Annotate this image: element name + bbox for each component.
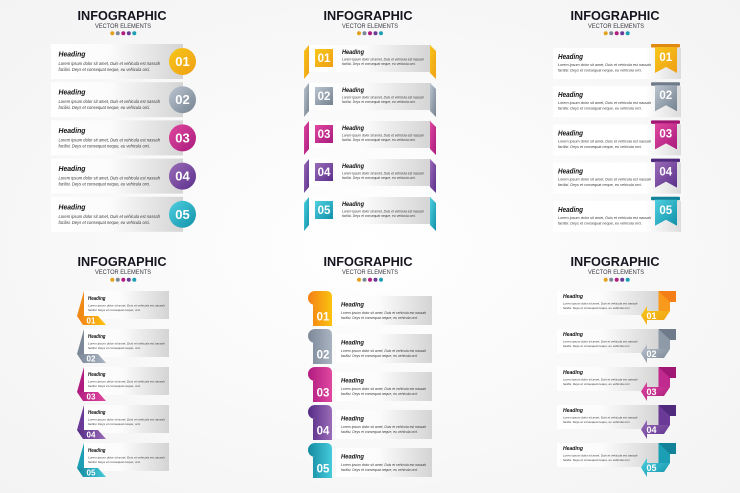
row 03: Lorem ipsum dolor sit amet, Duis et vehicula est nassah bbox=[88, 380, 165, 384]
row 04: Heading bbox=[563, 408, 584, 414]
row 01: facilisi. Deys et consequat neque, eu vehicula orci. bbox=[58, 67, 150, 72]
row 05 bbox=[308, 443, 432, 478]
title: INFOGRAPHIC bbox=[324, 8, 413, 23]
row 02: facilisi. Deys et consequat neque, eu vehicula orci. bbox=[558, 107, 642, 111]
row 04: Lorem ipsum dolor sit amet, Duis et vehicula est nassah bbox=[563, 416, 638, 420]
row 01: facilisi. Deys et consequat neque, eu vehicula orci. bbox=[558, 68, 642, 72]
row 03: Heading bbox=[341, 378, 364, 384]
subtitle: VECTOR ELEMENTS bbox=[588, 23, 645, 30]
row 05: Lorem ipsum dolor sit amet, Duis et vehicula est nassah bbox=[58, 214, 161, 219]
row 05: 05 bbox=[646, 463, 657, 473]
row 04: 04 bbox=[175, 169, 190, 184]
title: INFOGRAPHIC bbox=[324, 254, 413, 269]
row 01: Lorem ipsum dolor sit amet, Duis et vehicula est nassah bbox=[341, 311, 426, 315]
row 02: 02 bbox=[317, 350, 329, 362]
row 03: Lorem ipsum dolor sit amet, Duis et vehicula est nassah bbox=[58, 137, 161, 142]
panel: circle badges bbox=[51, 8, 196, 232]
row 05: Heading bbox=[342, 201, 364, 208]
row 01: 01 bbox=[659, 52, 673, 64]
row 05: Heading bbox=[58, 202, 86, 211]
row 03: facilisi. Deys et consequat neque, eu vehicula orci. bbox=[558, 145, 642, 149]
panel: square badges with side ribbons bbox=[304, 8, 436, 231]
row 03: Heading bbox=[58, 126, 86, 135]
subtitle: VECTOR ELEMENTS bbox=[588, 269, 645, 276]
row 05: 05 bbox=[87, 468, 96, 478]
row 02 bbox=[553, 82, 681, 117]
row 03: 03 bbox=[659, 128, 672, 140]
row 04: Heading bbox=[58, 164, 86, 173]
colour dots bbox=[604, 278, 630, 282]
row 01 bbox=[304, 45, 436, 79]
row 03: facilisi. Deys et consequat neque, eu vehicula orci. bbox=[341, 392, 418, 396]
row 05: 05 bbox=[175, 207, 190, 222]
row 01: Heading bbox=[88, 296, 106, 302]
title: INFOGRAPHIC bbox=[78, 254, 167, 269]
row 01: Lorem ipsum dolor sit amet, Duis et vehicula est nassah bbox=[58, 61, 161, 66]
row 05: facilisi. Deys et consequat neque, eu vehicula orci. bbox=[341, 468, 418, 472]
row 05: 05 bbox=[659, 205, 673, 217]
row 05: Lorem ipsum dolor sit amet, Duis et vehicula est nassah bbox=[341, 463, 426, 467]
colour dots bbox=[110, 31, 136, 35]
row 02 bbox=[557, 329, 676, 363]
row 04: facilisi. Deys et consequat neque, eu vehicula orci. bbox=[341, 430, 418, 434]
row 03 bbox=[51, 120, 196, 155]
row 03 bbox=[304, 121, 436, 155]
row 04 bbox=[304, 159, 436, 193]
row 02: Heading bbox=[563, 332, 584, 338]
row 05 bbox=[553, 197, 681, 232]
row 02: Heading bbox=[88, 334, 106, 340]
row 02: 02 bbox=[175, 92, 190, 107]
row 05: Heading bbox=[558, 207, 584, 214]
row 04 bbox=[77, 405, 169, 440]
row 04: 04 bbox=[317, 426, 330, 438]
row 04: facilisi. Deys et consequat neque, eu vehicula orci. bbox=[342, 176, 416, 180]
row 03: Heading bbox=[88, 372, 106, 378]
row 01: facilisi. Deys et consequat neque, orci. bbox=[88, 308, 141, 312]
row 01: Heading bbox=[58, 50, 86, 58]
row 01 bbox=[308, 291, 432, 326]
row 05: Heading bbox=[341, 454, 364, 460]
row 05: 05 bbox=[317, 464, 330, 476]
row 05: Lorem ipsum dolor sit amet, Duis et vehicula est nassah bbox=[342, 210, 424, 214]
row 03 bbox=[553, 120, 681, 155]
colour dots bbox=[110, 278, 136, 282]
row 01 bbox=[51, 44, 196, 79]
row 02: Lorem ipsum dolor sit amet, Duis et vehicula est nassah bbox=[558, 101, 651, 105]
row 02: facilisi. Deys et consequat neque, eu vehicula orci. bbox=[341, 354, 418, 358]
row 02: facilisi. Deys et consequat neque, eu vehicula orci. bbox=[563, 344, 630, 348]
row 04: facilisi. Deys et consequat neque, eu vehicula orci. bbox=[58, 182, 150, 187]
row 02: 02 bbox=[318, 91, 330, 103]
row 04: Lorem ipsum dolor sit amet, Duis et vehicula est nassah bbox=[58, 176, 161, 181]
row 02: Lorem ipsum dolor sit amet, Duis et vehicula est nassah bbox=[341, 349, 426, 353]
row 03 bbox=[308, 367, 432, 402]
row 05: 05 bbox=[318, 205, 331, 217]
row 05: Heading bbox=[563, 446, 584, 452]
row 01 bbox=[77, 291, 169, 326]
row 04: Lorem ipsum dolor sit amet, Duis et vehicula est nassah bbox=[88, 418, 165, 422]
row 05 bbox=[304, 197, 436, 231]
row 02 bbox=[51, 82, 196, 117]
subtitle: VECTOR ELEMENTS bbox=[342, 269, 399, 276]
row 02: Lorem ipsum dolor sit amet, Duis et vehicula est nassah bbox=[342, 96, 424, 100]
row 04: Lorem ipsum dolor sit amet, Duis et vehicula est nassah bbox=[342, 172, 424, 176]
row 04: 04 bbox=[318, 167, 331, 179]
row 02: facilisi. Deys et consequat neque, eu vehicula orci. bbox=[58, 105, 150, 110]
row 04 bbox=[308, 405, 432, 440]
row 03: Lorem ipsum dolor sit amet, Duis et vehicula est nassah bbox=[563, 378, 638, 382]
subtitle: VECTOR ELEMENTS bbox=[95, 23, 152, 30]
row 03: Heading bbox=[563, 370, 584, 376]
row 03: Heading bbox=[558, 130, 584, 137]
colour dots bbox=[357, 31, 383, 35]
row 04: Heading bbox=[341, 416, 364, 422]
row 01: facilisi. Deys et consequat neque, eu vehicula orci. bbox=[563, 306, 630, 310]
row 05 bbox=[77, 443, 169, 478]
row 05: Lorem ipsum dolor sit amet, Duis et vehicula est nassah bbox=[558, 216, 651, 220]
row 04: 04 bbox=[87, 430, 96, 440]
row 01 bbox=[557, 291, 676, 325]
row 04: Heading bbox=[88, 410, 106, 416]
row 02: facilisi. Deys et consequat neque, orci. bbox=[88, 346, 141, 350]
row 02 bbox=[77, 329, 169, 364]
row 01: Lorem ipsum dolor sit amet, Duis et vehicula est nassah bbox=[88, 304, 165, 308]
row 02: Lorem ipsum dolor sit amet, Duis et vehicula est nassah bbox=[88, 342, 165, 346]
row 03: Heading bbox=[342, 125, 364, 132]
row 02: Heading bbox=[342, 87, 364, 94]
colour dots bbox=[604, 31, 630, 35]
row 04: Lorem ipsum dolor sit amet, Duis et vehicula est nassah bbox=[341, 425, 426, 429]
row 02: Heading bbox=[341, 340, 364, 346]
row 01: 01 bbox=[646, 311, 657, 321]
row 01: Heading bbox=[558, 54, 584, 61]
row 04: facilisi. Deys et consequat neque, eu vehicula orci. bbox=[558, 183, 642, 187]
row 02: Lorem ipsum dolor sit amet, Duis et vehicula est nassah bbox=[563, 340, 638, 344]
row 05: facilisi. Deys et consequat neque, eu vehicula orci. bbox=[58, 220, 150, 225]
row 04: Heading bbox=[558, 169, 584, 176]
row 03: Lorem ipsum dolor sit amet, Duis et vehicula est nassah bbox=[558, 139, 651, 143]
row 01: 01 bbox=[318, 53, 331, 65]
row 03: facilisi. Deys et consequat neque, eu vehicula orci. bbox=[342, 138, 416, 142]
row 02: Heading bbox=[58, 88, 86, 97]
row 02: Lorem ipsum dolor sit amet, Duis et vehicula est nassah bbox=[58, 99, 161, 104]
title: INFOGRAPHIC bbox=[570, 8, 660, 23]
row 05 bbox=[51, 197, 196, 232]
row 04: 04 bbox=[659, 167, 673, 179]
panel: arrow tab badges bbox=[77, 254, 169, 478]
row 01: Lorem ipsum dolor sit amet, Duis et vehicula est nassah bbox=[342, 58, 424, 62]
row 04: Lorem ipsum dolor sit amet, Duis et vehicula est nassah bbox=[558, 178, 651, 182]
row 02: 02 bbox=[87, 354, 96, 364]
title: INFOGRAPHIC bbox=[570, 254, 660, 269]
row 05: Lorem ipsum dolor sit amet, Duis et vehicula est nassah bbox=[88, 456, 165, 460]
panel: bookmark badges bbox=[553, 8, 681, 232]
row 02: Heading bbox=[558, 92, 584, 99]
row 05: Heading bbox=[88, 448, 106, 454]
row 03 bbox=[557, 367, 676, 401]
row 05: facilisi. Deys et consequat neque, eu vehicula orci. bbox=[558, 221, 642, 225]
row 01: 01 bbox=[175, 54, 190, 69]
row 01 bbox=[553, 44, 681, 79]
subtitle: VECTOR ELEMENTS bbox=[342, 23, 399, 30]
row 01: Heading bbox=[342, 49, 364, 56]
row 03: facilisi. Deys et consequat neque, orci. bbox=[88, 384, 141, 388]
panel: folded arrow badges bbox=[557, 254, 676, 477]
row 02 bbox=[308, 329, 432, 364]
row 04: Heading bbox=[342, 163, 364, 170]
row 03: Lorem ipsum dolor sit amet, Duis et vehicula est nassah bbox=[341, 387, 426, 391]
row 03: facilisi. Deys et consequat neque, eu vehicula orci. bbox=[563, 382, 630, 386]
row 03 bbox=[77, 367, 169, 402]
row 01: facilisi. Deys et consequat neque, eu vehicula orci. bbox=[341, 316, 418, 320]
row 04 bbox=[51, 159, 196, 194]
row 05: facilisi. Deys et consequat neque, orci. bbox=[88, 460, 141, 464]
row 05 bbox=[557, 443, 676, 477]
row 02 bbox=[304, 83, 436, 117]
row 01: 01 bbox=[317, 312, 330, 324]
row 05: facilisi. Deys et consequat neque, eu vehicula orci. bbox=[342, 214, 416, 218]
row 01: Heading bbox=[563, 294, 584, 300]
row 04: facilisi. Deys et consequat neque, eu vehicula orci. bbox=[563, 420, 630, 424]
row 05: Lorem ipsum dolor sit amet, Duis et vehicula est nassah bbox=[563, 454, 638, 458]
colour dots bbox=[357, 278, 383, 282]
row 03: 03 bbox=[646, 387, 657, 397]
panel: scroll badges bbox=[308, 254, 432, 478]
row 02: 02 bbox=[659, 90, 672, 102]
row 03: 03 bbox=[318, 129, 330, 141]
row 04 bbox=[557, 405, 676, 439]
row 03: Lorem ipsum dolor sit amet, Duis et vehicula est nassah bbox=[342, 134, 424, 138]
row 05: facilisi. Deys et consequat neque, eu vehicula orci. bbox=[563, 458, 630, 462]
row 03: 03 bbox=[87, 392, 96, 402]
row 03: 03 bbox=[317, 388, 329, 400]
row 02: 02 bbox=[646, 349, 657, 359]
row 01: Heading bbox=[341, 302, 364, 308]
row 01: 01 bbox=[87, 316, 96, 326]
row 01: Lorem ipsum dolor sit amet, Duis et vehicula est nassah bbox=[558, 63, 651, 67]
subtitle: VECTOR ELEMENTS bbox=[95, 269, 152, 276]
row 03: facilisi. Deys et consequat neque, eu vehicula orci. bbox=[58, 143, 150, 148]
row 01: facilisi. Deys et consequat neque, eu vehicula orci. bbox=[342, 62, 416, 66]
row 04: facilisi. Deys et consequat neque, orci. bbox=[88, 422, 141, 426]
row 01: Lorem ipsum dolor sit amet, Duis et vehicula est nassah bbox=[563, 302, 638, 306]
row 04: 04 bbox=[646, 425, 657, 435]
title: INFOGRAPHIC bbox=[78, 8, 167, 23]
row 03: 03 bbox=[175, 130, 190, 145]
row 02: facilisi. Deys et consequat neque, eu vehicula orci. bbox=[342, 100, 416, 104]
row 04 bbox=[553, 159, 681, 194]
